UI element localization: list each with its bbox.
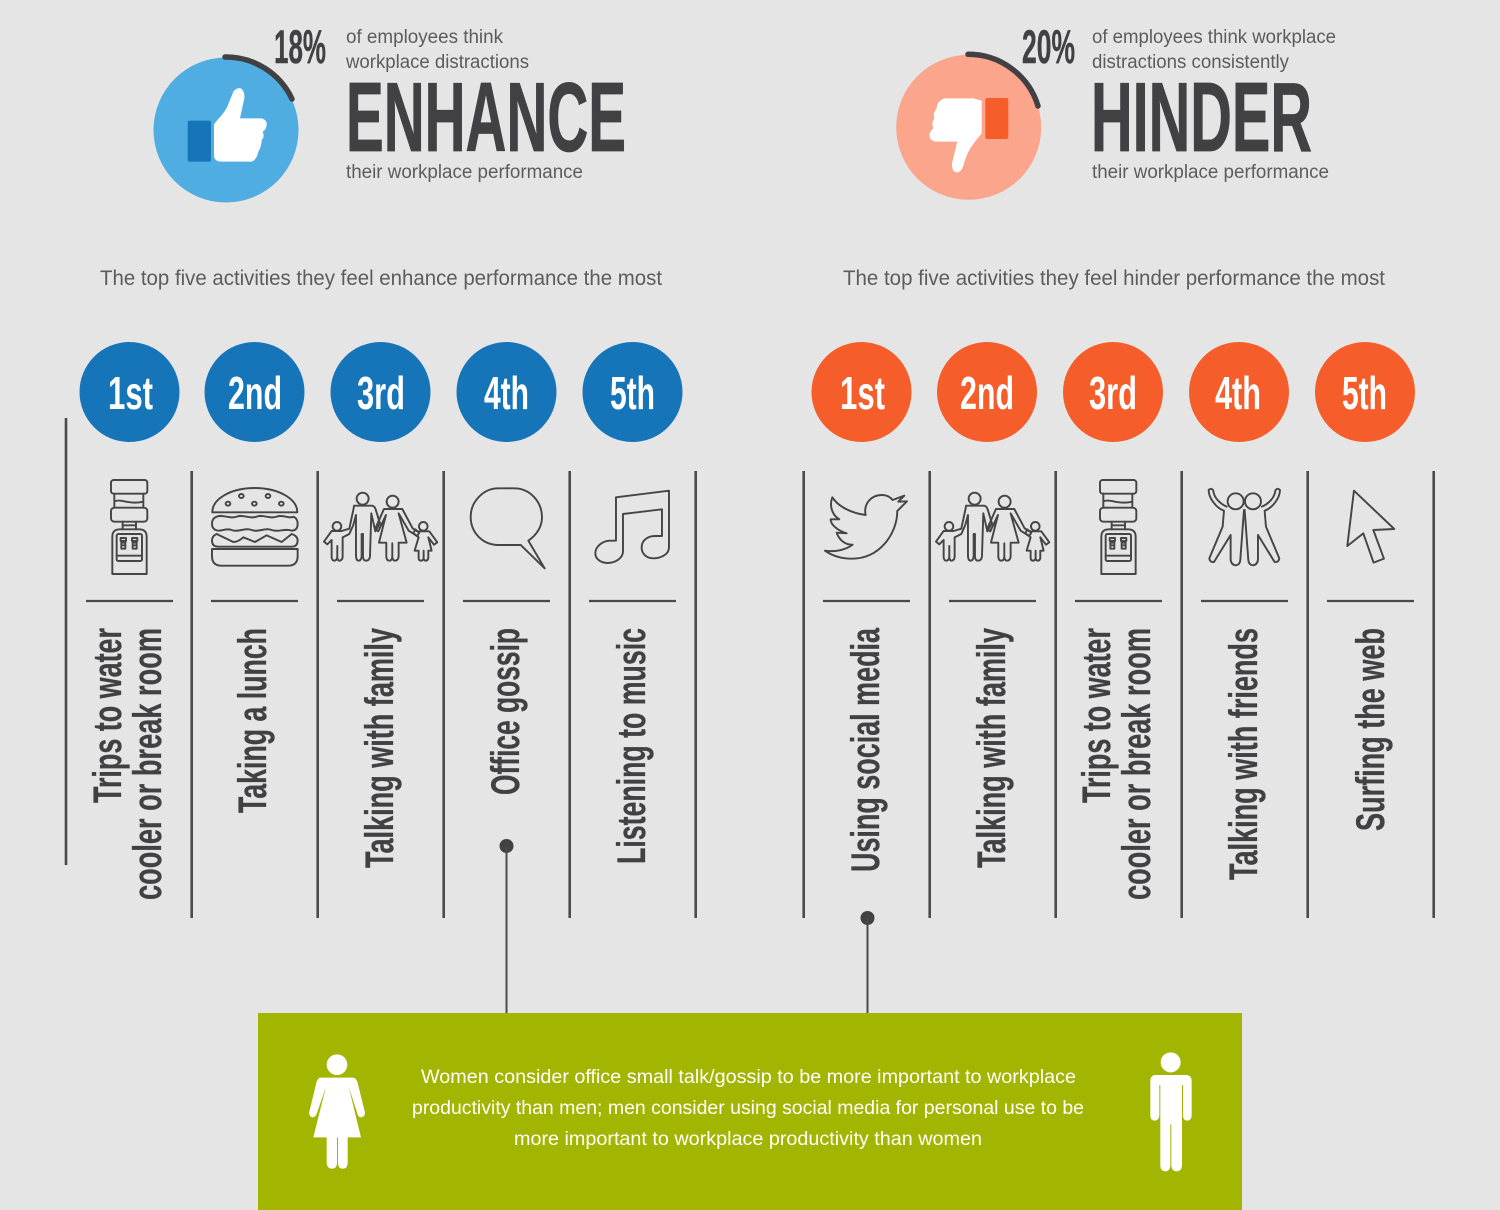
- panel: enhance column 1: [80, 342, 180, 900]
- label: talking with friends: Talking with friends: [1222, 628, 1266, 880]
- panel: enhance column 2: [204, 342, 304, 813]
- rank badge: 1st: 1st: [108, 367, 153, 419]
- text: callout message: productivity than men; men consider using social media for personal use to be: [412, 1097, 1084, 1119]
- icon: music notes: [595, 491, 669, 563]
- icon: burger: [212, 488, 298, 566]
- rank badge: 4th: 4th: [1215, 367, 1261, 419]
- text: hinder intro: distractions consistently: [1092, 52, 1289, 73]
- subheading: hinder list: The top five activities they feel hinder performance the most: [843, 267, 1385, 290]
- icon: twitter bird: [825, 495, 907, 559]
- icon: man: [1150, 1052, 1192, 1171]
- panel: hinder column 4: [1189, 342, 1289, 880]
- icon: two friends: [1209, 489, 1280, 565]
- label: trips to water cooler or break room: [86, 628, 170, 900]
- panel: hinder column 3: [1063, 342, 1163, 900]
- rank badge: 1st: [812, 342, 912, 442]
- label: office gossip: Office gossip: [484, 628, 528, 795]
- rank badge: 4th: [456, 342, 556, 442]
- rank badge: 3rd: 3rd: [1089, 367, 1137, 419]
- rank badge: 4th: 4th: [484, 367, 529, 419]
- text: callout message: Women consider office small talk/gossip to be more important to workplace: [421, 1066, 1076, 1088]
- panel: enhance header: [154, 20, 626, 202]
- panel: hinder column 5: [1315, 342, 1415, 831]
- text: enhance intro: [345, 27, 529, 73]
- rank badge: 5th: 5th: [610, 367, 655, 419]
- rank badge: 2nd: 2nd: [960, 367, 1014, 419]
- label: trips to water cooler or break room: [1075, 628, 1159, 900]
- connector: office gossip to callout: [500, 839, 514, 1013]
- icon: water cooler: [111, 480, 147, 574]
- label: trips to water cooler or break room: Trips to water: [86, 628, 130, 803]
- rank badge: 5th: [582, 342, 682, 442]
- rank badge: 2nd: 2nd: [228, 367, 282, 419]
- icon: thumbs down badge: [896, 54, 1041, 200]
- text: hinder intro: of employees think workplace: [1092, 27, 1336, 48]
- heading: ENHANCE: ENHANCE: [346, 62, 626, 172]
- panel: enhance column 4: [456, 342, 556, 795]
- rank badge: 1st: [80, 342, 180, 442]
- icon: speech bubble: [471, 488, 545, 568]
- label: talking with family: Talking with family: [970, 627, 1014, 868]
- label: trips to water cooler or break room: cooler or break room: [126, 628, 170, 900]
- label: taking a lunch: Taking a lunch: [231, 628, 275, 813]
- icon: water cooler: [1100, 480, 1136, 574]
- stat: 20%: 20%: [1022, 20, 1075, 73]
- stat: 18%: 18%: [274, 20, 326, 73]
- panel: hinder header: [896, 20, 1336, 200]
- text: hinder intro: [1092, 27, 1336, 73]
- panel: hinder column 1: [812, 342, 912, 872]
- text: enhance intro: workplace distractions: [345, 52, 529, 73]
- rank badge: 5th: [1315, 342, 1415, 442]
- label: using social media: Using social media: [844, 627, 888, 872]
- rank badge: 3rd: [330, 342, 430, 442]
- heading: HINDER: HINDER: [1091, 62, 1312, 172]
- icon: cursor arrow: [1347, 491, 1394, 563]
- panel: enhance column 3: [324, 342, 437, 868]
- label: talking with family: Talking with family: [358, 627, 402, 868]
- callout: gender comparison: [258, 1013, 1242, 1210]
- rank badge: 2nd: [204, 342, 304, 442]
- text: callout message: more important to workplace productivity than women: [514, 1128, 982, 1150]
- text: enhance outro: their workplace performance: [346, 162, 583, 183]
- label: trips to water cooler or break room: Trips to water: [1075, 628, 1119, 803]
- text: hinder outro: their workplace performance: [1092, 162, 1329, 183]
- rank badge: 3rd: [1063, 342, 1163, 442]
- panel: hinder column 2: [936, 342, 1049, 868]
- connector: social media to callout: [860, 911, 874, 1013]
- label: trips to water cooler or break room: cooler or break room: [1115, 628, 1159, 900]
- icon: family: [936, 493, 1049, 561]
- rank badge: 4th: [1189, 342, 1289, 442]
- rank badge: 3rd: 3rd: [357, 367, 405, 419]
- rank badge: 2nd: [937, 342, 1037, 442]
- icon: thumbs up badge: [154, 57, 298, 202]
- rank badge: 1st: 1st: [840, 367, 885, 419]
- text: enhance intro: of employees think: [346, 27, 503, 48]
- subheading: enhance list: The top five activities they feel enhance performance the most: [100, 267, 662, 290]
- icon: family: [324, 493, 437, 561]
- text: callout message: [412, 1066, 1084, 1150]
- rank badge: 5th: 5th: [1342, 367, 1387, 419]
- icon: woman: [309, 1054, 365, 1169]
- label: listening to music: Listening to music: [610, 628, 654, 864]
- label: surfing the web: Surfing the web: [1349, 628, 1393, 831]
- panel: enhance column 5: [582, 342, 682, 864]
